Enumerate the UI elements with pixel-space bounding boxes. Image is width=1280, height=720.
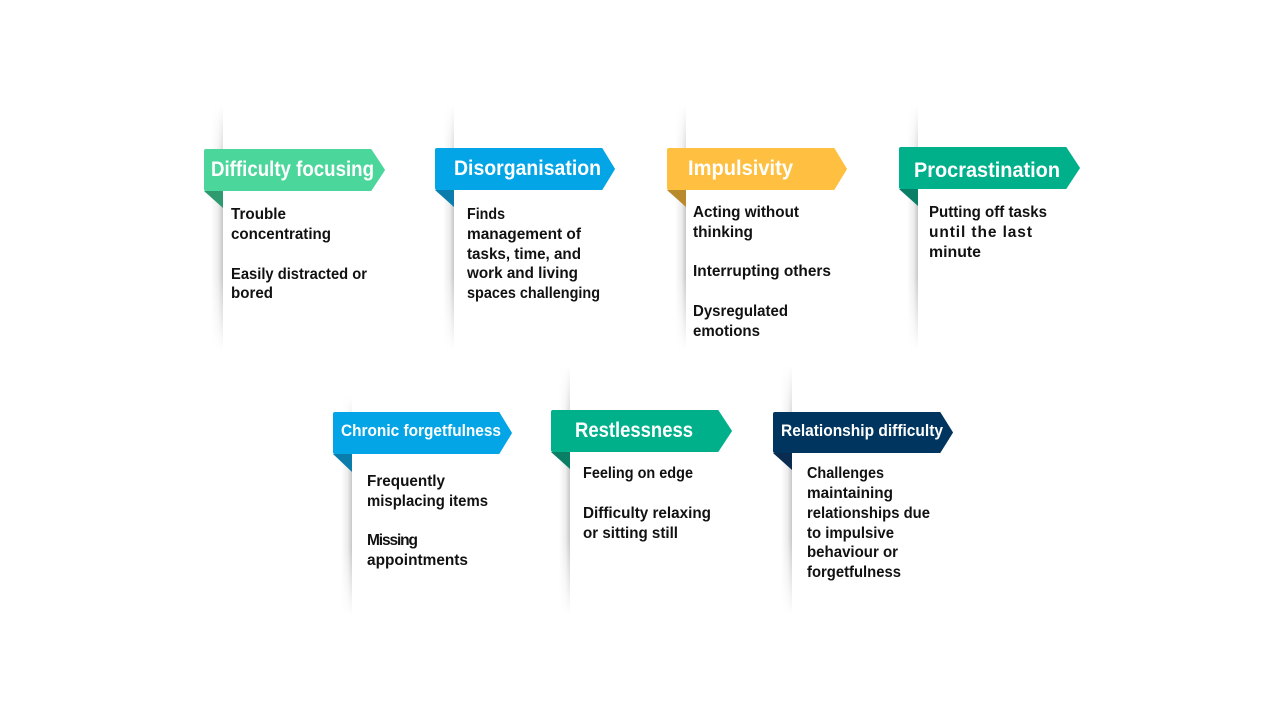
ribbon: Relationship difficulty: Relationship difficulty (781, 421, 943, 440)
text: Relationship difficulty details: relationships due (807, 505, 930, 522)
text: Relationship difficulty details: forgetfulness (807, 564, 901, 581)
text: Impulsivity details (693, 204, 831, 340)
card: Restlessness (551, 365, 732, 615)
text: Chronic forgetfulness details: misplacing items (367, 493, 488, 510)
text: Relationship difficulty details: maintaining (807, 485, 893, 502)
text: Difficulty focusing details: Easily distracted or (231, 266, 367, 283)
text: Disorganisation details (466, 206, 600, 302)
text: Difficulty focusing details: Trouble (231, 206, 286, 223)
ribbon: Procrastination: Procrastination (914, 159, 1060, 182)
card: Disorganisation (435, 105, 614, 350)
ribbon: Relationship difficulty (774, 412, 952, 452)
text: Impulsivity details: emotions (693, 323, 760, 340)
text: Impulsivity details: Dysregulated (693, 303, 788, 320)
text: Difficulty focusing details (231, 206, 367, 302)
text: Procrastination details: Putting off tasks (929, 204, 1047, 221)
text: Difficulty focusing details: concentrating (231, 226, 331, 243)
text: Impulsivity details: thinking (693, 224, 753, 241)
ribbon: Disorganisation: Disorganisation (454, 157, 601, 180)
text: Impulsivity details: Interrupting others (693, 263, 831, 280)
text: Procrastination details (929, 204, 1047, 261)
card: Procrastination (899, 105, 1080, 350)
text: Relationship difficulty details: Challenges (807, 465, 884, 482)
text: Disorganisation details: work and living (466, 265, 578, 282)
ribbon: Difficulty focusing: Difficulty focusing (211, 158, 374, 181)
ribbon: Difficulty focusing (204, 150, 384, 190)
text: Restlessness details (583, 465, 711, 542)
ribbon: Chronic forgetfulness: Chronic forgetfulness (341, 421, 501, 440)
card: Impulsivity (667, 105, 846, 350)
ribbon: Chronic forgetfulness (334, 412, 512, 454)
text: Disorganisation details: tasks, time, and (467, 246, 581, 263)
text: Chronic forgetfulness details: Missing (367, 532, 418, 549)
text: Chronic forgetfulness details (367, 473, 488, 569)
text: Restlessness details: Feeling on edge (583, 465, 693, 482)
card: Relationship difficulty (773, 365, 952, 615)
text: Restlessness details: Difficulty relaxing (583, 505, 711, 522)
text: Chronic forgetfulness details: appointments (367, 552, 468, 569)
text: Restlessness details: or sitting still (583, 525, 678, 542)
ribbon: Procrastination (900, 148, 1080, 188)
text: Difficulty focusing details: bored (231, 285, 273, 302)
text: Impulsivity details: Acting without (693, 204, 799, 221)
card: Difficulty focusing (204, 105, 384, 350)
text: Chronic forgetfulness details: Frequently (367, 473, 445, 490)
ribbon: Restlessness: Restlessness (575, 419, 693, 442)
card: Chronic forgetfulness (333, 397, 512, 615)
text: Disorganisation details: management of (467, 226, 582, 243)
ribbon: Impulsivity (668, 148, 846, 190)
text: Relationship difficulty details: to impulsive (807, 525, 894, 542)
ribbon: Disorganisation (436, 148, 614, 190)
text: Disorganisation details: spaces challenging (467, 285, 600, 302)
text: Disorganisation details: Finds (467, 206, 505, 223)
text: Relationship difficulty details (807, 465, 930, 581)
text: Procrastination details: until the last (929, 224, 1032, 241)
text: Procrastination details: minute (929, 244, 981, 261)
ribbon: Impulsivity: Impulsivity (688, 157, 793, 180)
text: Relationship difficulty details: behaviour or (807, 544, 898, 561)
ribbon: Restlessness (552, 410, 732, 452)
